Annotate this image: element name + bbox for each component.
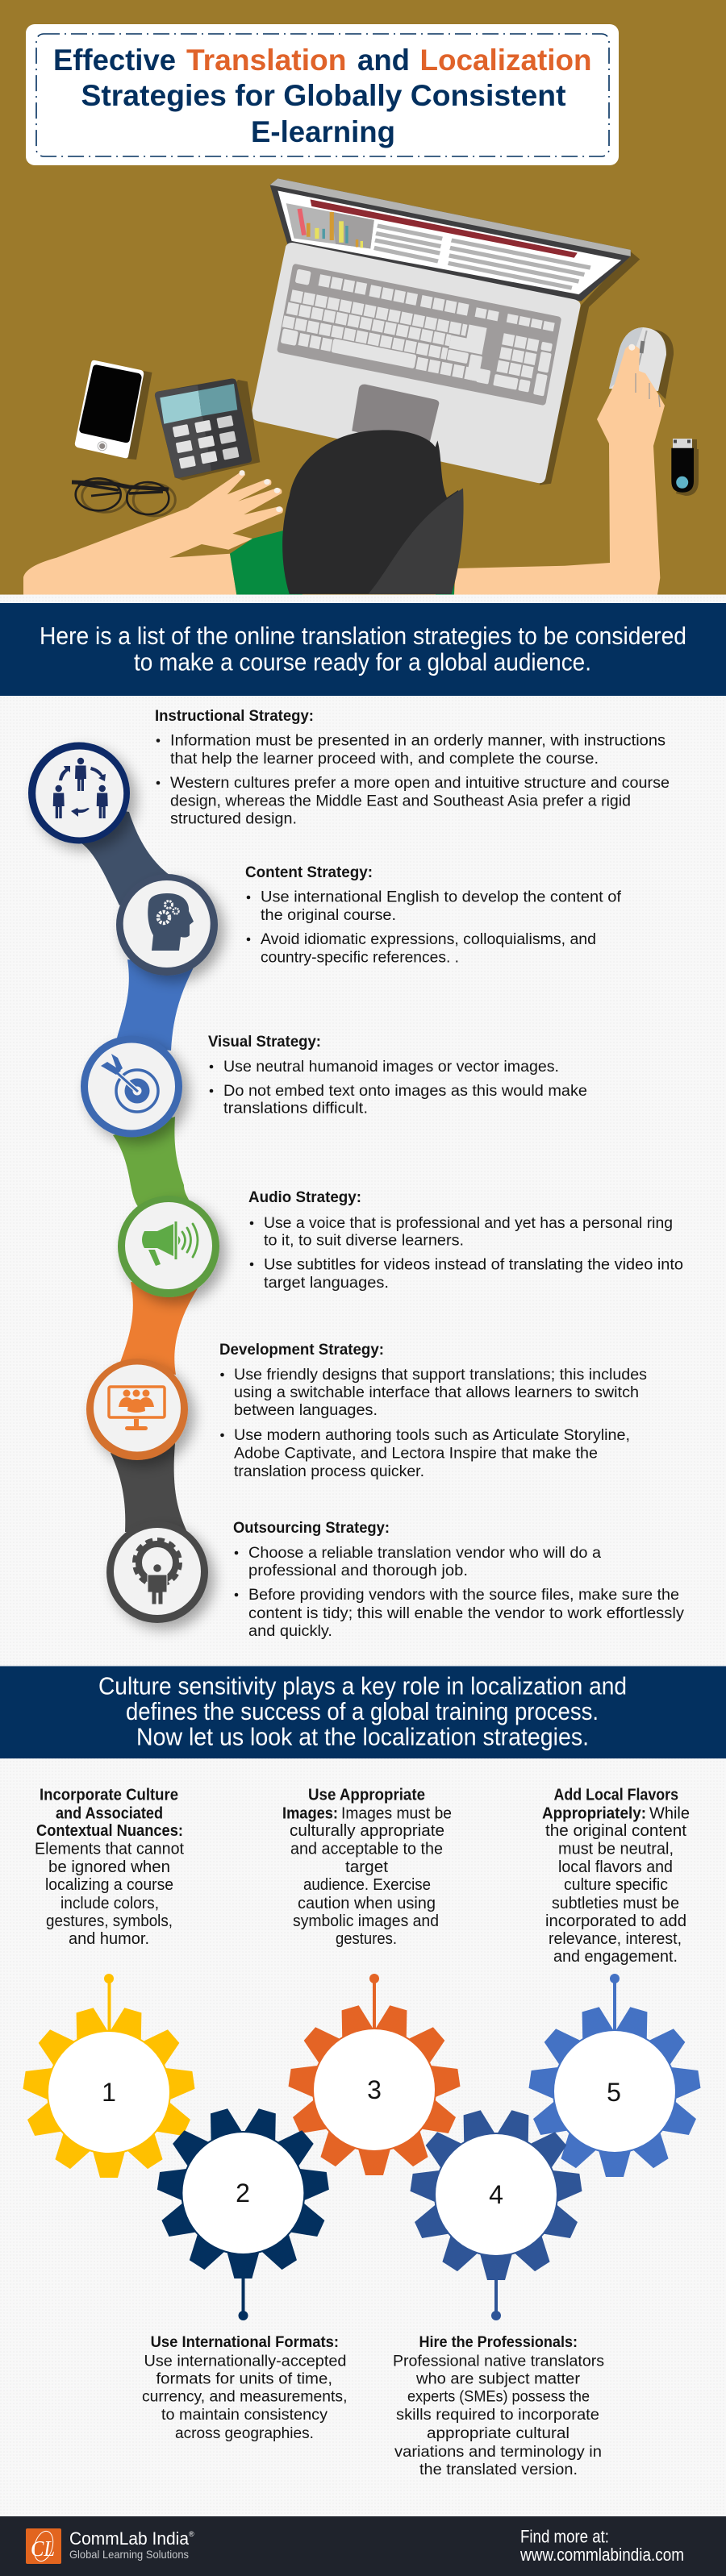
text block: local flavors: local flavors and [558, 1858, 673, 1876]
logo: CommLab India: CL [31, 2536, 55, 2561]
logo: CommLab India: CommLab India [69, 2528, 190, 2549]
bullet list: audio strategy [250, 1215, 683, 1292]
bullet list: content strategy: country-specific references. . [261, 950, 459, 966]
text block: local flavors: subtleties must be [552, 1895, 679, 1912]
text block: culture and contextual nuances: and humor. [69, 1930, 149, 1948]
panel: outsourcing strategy [106, 1520, 685, 1640]
text block: culture and contextual nuances: be ignored when [48, 1858, 170, 1876]
icon: calculator [155, 378, 260, 481]
bullet list: outsourcing strategy: Before providing vendors with the source files, make sure the [248, 1587, 679, 1604]
text block: hire the professionals: who are subject matter [415, 2370, 581, 2388]
bullet list: development strategy: translation process quicker. [234, 1463, 424, 1480]
text block: culture and contextual nuances: Incorporate Culture [40, 1786, 178, 1804]
bullet list: outsourcing strategy: Choose a reliable translation vendor who will do a [248, 1545, 601, 1562]
icon: circle with target and arrow [81, 1035, 182, 1137]
text block: hire the professionals: appropriate cultural [427, 2425, 570, 2442]
heading: audio strategy: Audio Strategy: [248, 1189, 361, 1206]
text block: culture and contextual nuances [35, 1786, 184, 1948]
gear 4: mid blue: 4 [489, 2180, 503, 2209]
text block: appropriate images: caution when using [298, 1895, 436, 1912]
bullet list: content strategy: the original course. [261, 907, 396, 924]
title text: Localization [419, 44, 592, 77]
left arm and hand [23, 470, 283, 595]
icon: smartphone [75, 360, 152, 460]
text block: international formats: across geographies. [175, 2425, 314, 2442]
logo: CommLab India: ® [189, 2530, 194, 2538]
text block: local flavors: and engagement. [553, 1948, 678, 1966]
panel: content strategy [116, 864, 622, 976]
banner: localization intro [0, 1666, 726, 1758]
text block: hire the professionals: the translated version. [419, 2462, 578, 2478]
gear 4: mid blue [409, 2108, 583, 2320]
text block: appropriate images: culturally appropriate [290, 1822, 444, 1840]
text block: local flavors: While [649, 1805, 690, 1823]
text block: local flavors: incorporated to add [545, 1912, 686, 1930]
text block: local flavors: Add Local Flavors [553, 1786, 678, 1804]
panel: visual strategy [81, 1034, 587, 1137]
text block: hire the professionals: experts (SMEs) possess the [407, 2388, 590, 2405]
text block: hire the professionals: Professional native translators [393, 2353, 604, 2370]
bullet list: outsourcing strategy: and quickly. [248, 1623, 332, 1640]
text block: hire the professionals [393, 2334, 604, 2478]
gear 2: navy [156, 2107, 330, 2320]
text block: culture and contextual nuances: localizing a course [45, 1876, 173, 1894]
bullet list: development strategy: Use modern authoring tools such as Articulate Storyline, [234, 1427, 630, 1444]
banner: localization intro: Now let us look at the localization strategies. [136, 1722, 589, 1751]
text block: international formats [142, 2334, 347, 2442]
heading: instructional strategy: Instructional Strategy: [155, 708, 314, 725]
bullet list: visual strategy [210, 1059, 587, 1117]
gear 5: light blue [528, 1974, 702, 2177]
bullet list: outsourcing strategy: content is tidy; this will enable the vendor to work effortlessly [248, 1605, 685, 1622]
keyboard [277, 264, 561, 406]
text block: appropriate images [282, 1786, 452, 1948]
text block: culture and contextual nuances: include colors, [60, 1895, 159, 1912]
logo: CommLab India: Global Learning Solutions [69, 2548, 189, 2561]
icon: circle with gear and person [106, 1521, 208, 1623]
text block: international formats: Use internationally-accepted [144, 2353, 347, 2370]
text block: international formats: Use International Formats: [151, 2334, 339, 2351]
icon: circle with people cycle [28, 742, 130, 843]
bullet list: audio strategy: Use subtitles for videos instead of translating the video into [264, 1257, 683, 1274]
gear 3: orange: 3 [367, 2075, 382, 2104]
strategy timeline connectors [81, 806, 198, 1532]
gear 3: orange [287, 1974, 461, 2175]
text block: hire the professionals: skills required to incorporate [396, 2407, 599, 2424]
title text: and [357, 44, 410, 77]
bullet list: visual strategy: translations difficult. [223, 1101, 368, 1117]
gear 1: yellow: 1 [102, 2078, 116, 2107]
text block: appropriate images: gestures. [336, 1930, 397, 1948]
bullet list: visual strategy: Use neutral humanoid images or vector images. [223, 1059, 559, 1076]
text block: appropriate images: Images: [282, 1805, 338, 1823]
text block: local flavors: must be neutral, [558, 1840, 674, 1858]
bullet list: development strategy: Adobe Captivate, and Lectora Inspire that make the [234, 1445, 598, 1463]
heading: content strategy: Content Strategy: [245, 864, 373, 881]
bullet list: visual strategy: Do not embed text onto images as this would make [223, 1083, 587, 1100]
bullet list: development strategy: using a switchable interface that allows learners to switch [234, 1384, 639, 1401]
text block: appropriate images: audience. Exercise [303, 1876, 431, 1894]
text block: culture and contextual nuances: Contextual Nuances: [36, 1822, 183, 1840]
contact link text [519, 2527, 684, 2565]
icon: usb drive [671, 439, 699, 496]
bullet list: outsourcing strategy [235, 1545, 685, 1640]
bullet list: instructional strategy: structured design. [170, 811, 297, 828]
panel: instructional strategy [28, 708, 670, 843]
text block: international formats: formats for units of time, [156, 2370, 332, 2388]
icon: circle with head and gears [116, 874, 218, 976]
hero illustration panel [0, 0, 726, 595]
title text [53, 44, 592, 148]
title card [26, 24, 619, 165]
text block: local flavors [542, 1786, 690, 1966]
text block: local flavors: culture specific [564, 1876, 668, 1894]
contact link text: www.commlabindia.com [519, 2545, 684, 2565]
bullet list: instructional strategy: design, whereas the Middle East and Southeast Asia prefer a rigid [170, 793, 631, 809]
icon: mouse [609, 327, 674, 399]
icon: circle with megaphone [118, 1196, 219, 1297]
banner: translation intro [0, 603, 726, 696]
text block: appropriate images: Use Appropriate [308, 1786, 425, 1804]
gear 2: navy: 2 [236, 2179, 250, 2208]
bullet list: content strategy: Use international English to develop the content of [261, 888, 622, 906]
bullet list: content strategy [247, 888, 622, 966]
bullet list: instructional strategy: Information must be presented in an orderly manner, with instructions [170, 732, 666, 749]
text block: international formats: currency, and measurements, [142, 2388, 347, 2405]
text block: appropriate images: Images must be [341, 1805, 452, 1823]
banner: localization intro: defines the success of a global training process. [126, 1697, 599, 1725]
text block: culture and contextual nuances: gestures, symbols, [46, 1912, 173, 1930]
heading: development strategy: Development Strategy: [219, 1342, 384, 1359]
gear 5: light blue: 5 [607, 2078, 621, 2107]
title text: Strategies for Globally Consistent [81, 79, 566, 112]
icon: circle with monitor and people [86, 1359, 188, 1460]
bullet list: development strategy [220, 1367, 647, 1480]
panel: audio strategy [118, 1189, 683, 1297]
right arm and hand [454, 344, 665, 595]
bullet list: development strategy: between languages. [234, 1402, 378, 1419]
bullet list: instructional strategy [156, 732, 670, 828]
bullet list: audio strategy: to it, to suit diverse learners. [264, 1232, 464, 1250]
text block: culture and contextual nuances: Elements that cannot [35, 1840, 184, 1858]
icon: glasses [72, 478, 175, 516]
title text: E-learning [251, 115, 395, 148]
hair [282, 430, 464, 594]
text block: hire the professionals: variations and terminology in [394, 2444, 602, 2461]
gear 1: yellow [22, 1974, 196, 2178]
text block: local flavors: the original content [545, 1822, 686, 1840]
title text: Translation [186, 44, 347, 77]
text block: hire the professionals: Hire the Professionals: [419, 2334, 578, 2351]
bullet list: outsourcing strategy: professional and thorough job. [248, 1563, 468, 1579]
banner: translation intro: to make a course ready for a global audience. [134, 648, 591, 676]
banner: localization intro: Culture sensitivity plays a key role in localization and [98, 1672, 627, 1700]
logo: CommLab India [26, 2528, 194, 2564]
text block: appropriate images: target [345, 1858, 388, 1876]
bullet list: instructional strategy: Western cultures prefer a more open and intuitive structure and course [170, 775, 670, 792]
green shirt [230, 530, 454, 595]
text block: local flavors: Appropriately: [542, 1805, 646, 1823]
heading: visual strategy: Visual Strategy: [208, 1034, 321, 1051]
bullet list: audio strategy: Use a voice that is professional and yet has a personal ring [264, 1215, 673, 1232]
panel: development strategy [86, 1342, 647, 1480]
text block: local flavors: relevance, interest, [549, 1930, 682, 1948]
title text: Effective [53, 44, 176, 77]
bullet list: development strategy: Use friendly designs that support translations; this includes [234, 1367, 647, 1384]
bullet list: audio strategy: target languages. [264, 1275, 389, 1292]
text block: culture and contextual nuances: and Associated [56, 1805, 163, 1823]
heading: outsourcing strategy: Outsourcing Strategy: [233, 1520, 390, 1537]
text block: international formats: to maintain consistency [161, 2407, 328, 2424]
bullet list: instructional strategy: that help the learner proceed with, and complete the course. [170, 751, 599, 768]
bullet list: content strategy: Avoid idiomatic expressions, colloquialisms, and [261, 931, 596, 948]
text block: appropriate images: symbolic images and [293, 1912, 439, 1930]
footer [0, 2516, 726, 2576]
contact link text: Find more at: [520, 2527, 609, 2546]
text block: appropriate images: and acceptable to the [290, 1840, 443, 1858]
icon: laptop [251, 178, 640, 485]
